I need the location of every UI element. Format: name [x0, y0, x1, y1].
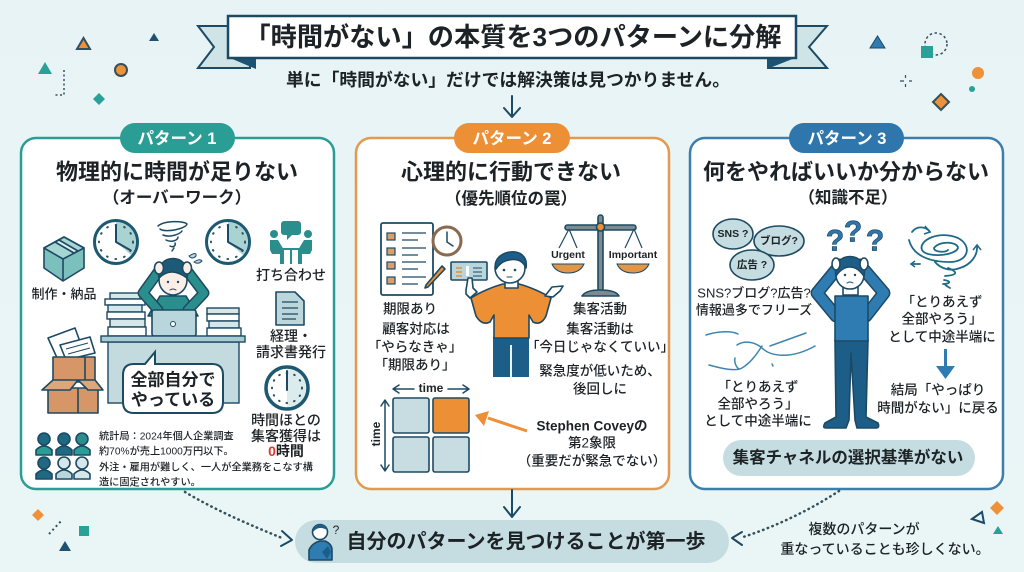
arrow: dotted from pattern 1 — [185, 492, 292, 546]
text: let's do everything right: として中途半端に — [888, 330, 996, 344]
note: patterns can overlap: 複数のパターンが — [808, 521, 920, 537]
text: statistics: 約70%が売上1000万円以下。 — [99, 444, 234, 458]
pill: pattern 3 label — [789, 123, 904, 153]
panel: pattern 3 — [690, 123, 1003, 489]
pill: pattern 1 label: パターン 1 — [138, 129, 216, 148]
icon: cardboard box with papers — [42, 328, 103, 413]
icon: balance scale: Important — [609, 249, 658, 261]
heading: pattern 1: 物理的に時間が足りない — [56, 160, 298, 184]
label: zero hours of marketing: 0時間 — [268, 443, 304, 459]
icon: meeting — [270, 221, 312, 264]
icon: option bubbles — [713, 219, 804, 280]
label: zero hours of marketing — [251, 412, 321, 459]
label: production: 制作・納品 — [31, 286, 97, 302]
text: marketing can wait: 緊急度が低いため、 — [539, 362, 661, 378]
illustration: confused person: ? — [826, 224, 844, 258]
pill: pattern 3 label: パターン 3 — [808, 129, 886, 148]
text: marketing can wait — [526, 320, 674, 396]
icon: tangled lines — [706, 332, 815, 370]
icon: tornado — [158, 222, 187, 251]
book stacks right — [207, 308, 241, 336]
text: customer response: 「やらなきゃ」 — [368, 340, 462, 354]
text: let's do everything right — [888, 294, 996, 344]
icon: balance scale — [551, 215, 658, 296]
icon: document — [276, 292, 304, 325]
heading: pattern 3: 何をやればいいか分からない — [703, 160, 989, 184]
subheading: pattern 2: （優先順位の罠） — [445, 189, 577, 208]
book stacks left — [105, 293, 146, 336]
title banner — [198, 16, 827, 69]
pill: pattern 1 label — [120, 123, 235, 153]
subtitle: 単に「時間がない」だけでは解決策は見つかりません。 — [286, 69, 730, 90]
text: Stephen Covey quadrant 2: Stephen Coveyの — [536, 418, 648, 434]
text: back to no time: 時間がない」に戻る — [877, 400, 999, 416]
arrow: dotted from pattern 3 — [732, 491, 839, 545]
label: accounting — [256, 328, 326, 360]
laptop — [152, 310, 196, 336]
text: back to no time: 結局「やっぱり — [891, 382, 985, 398]
note: patterns can overlap: 重なっていることも珍しくない。 — [780, 541, 990, 557]
icon: clock left — [94, 220, 138, 264]
subheading: pattern 1: （オーバーワーク） — [103, 188, 251, 207]
text: let's do everything right: 「とりあえず — [902, 294, 982, 310]
conclusion banner — [295, 520, 729, 563]
icon: checklist with clock and pencil — [381, 223, 461, 295]
label: accounting: 経理・ — [270, 328, 312, 344]
callout: doing everything myself: やっている — [131, 390, 215, 410]
text: customer response: 顧客対応は — [382, 320, 450, 336]
text: information overload — [696, 286, 812, 318]
label: meeting: 打ち合わせ — [256, 267, 326, 283]
text: customer response: 「期限あり」 — [374, 358, 456, 372]
person — [148, 296, 198, 316]
panel: pattern 2 — [356, 123, 674, 489]
illustration: confused person: ? — [866, 224, 884, 258]
text: let's do everything left: 「とりあえず — [718, 380, 798, 394]
label: zero hours of marketing: 時間ほとの — [251, 412, 321, 428]
panel: pattern 1 — [21, 123, 334, 489]
text: statistics: 外注・雇用が難しく、一人が全業務をこなす構 — [99, 460, 313, 474]
text: let's do everything right: 全部やろう」 — [902, 312, 982, 326]
callout: doing everything myself: 全部自分で — [130, 370, 216, 390]
text: information overload: 情報過多でフリーズ — [696, 302, 812, 318]
icon: swirl — [909, 226, 981, 288]
decorative shapes bottom left — [32, 509, 89, 551]
decorative shapes top left — [38, 33, 159, 105]
arrow: blue down — [936, 349, 955, 379]
text: marketing can wait: 集客活動は — [566, 320, 634, 336]
text: Stephen Covey quadrant 2: （重要だが緊急でない） — [518, 452, 666, 468]
callout: no channel criteria — [723, 440, 975, 476]
illustration: confused person — [817, 216, 884, 428]
text: marketing can wait: 「今日じゃなくていい」 — [526, 338, 674, 354]
illustration: confused person: ? — [844, 216, 862, 248]
desk — [108, 342, 239, 403]
text: let's do everything left: 全部やろう」 — [718, 396, 798, 412]
icon: people group — [36, 433, 90, 479]
icon: clock zero hours — [266, 367, 308, 409]
text: marketing can wait: 後回しに — [573, 382, 627, 396]
decorative shapes top right — [870, 33, 984, 110]
text: statistics: 造に固定されやすい。 — [99, 476, 201, 488]
text: Stephen Covey quadrant 2: 第2象限 — [568, 434, 617, 450]
pill: pattern 2 label: パターン 2 — [473, 129, 551, 148]
decorative shapes bottom right — [972, 501, 1004, 534]
conclusion banner: 自分のパターンを見つけることが第一歩 — [346, 529, 706, 553]
illustration: overworked person at desk — [101, 254, 245, 403]
text: customer response — [368, 320, 462, 372]
heading: pattern 2: 心理的に行動できない — [401, 160, 621, 184]
icon: option bubbles: SNS ? — [718, 228, 748, 240]
text: let's do everything left — [704, 380, 812, 428]
note: patterns can overlap — [780, 521, 990, 557]
chart: priority matrix — [369, 381, 469, 472]
title banner: 「時間がない」の本質を3つのパターンに分解 — [244, 22, 782, 52]
arrow: subtitle to panels — [504, 96, 520, 117]
text: let's do everything left: として中途半端に — [704, 414, 812, 428]
text: information overload: SNS?ブログ?広告? — [697, 286, 811, 300]
text: back to no time — [877, 382, 999, 416]
icon: parcel box — [44, 237, 84, 281]
arrow: centre down — [504, 490, 520, 517]
text: statistics — [99, 430, 313, 488]
icon: option bubbles: ブログ? — [760, 234, 798, 247]
chart: priority matrix: time — [369, 421, 383, 446]
subheading: pattern 3: （知識不足） — [798, 188, 898, 207]
icon: thinking person: ? — [333, 523, 340, 537]
illustration: person with card — [451, 252, 563, 377]
arrow: to quadrant 2 — [475, 411, 527, 431]
text: Stephen Covey quadrant 2 — [518, 418, 666, 468]
callout: doing everything myself — [123, 352, 223, 413]
text: statistics: 統計局：2024年個人企業調査 — [99, 430, 234, 442]
callout: no channel criteria: 集客チャネルの選択基準がない — [733, 447, 963, 467]
icon: balance scale: Urgent — [551, 249, 585, 261]
icon: option bubbles: 広告 ? — [737, 258, 767, 271]
label: accounting: 請求書発行 — [256, 344, 326, 360]
label: has deadline: 期限あり — [383, 302, 437, 316]
pill: pattern 2 label — [454, 123, 570, 153]
label: zero hours of marketing: 集客獲得は — [251, 428, 321, 444]
label: marketing: 集客活動 — [573, 300, 627, 316]
chart: priority matrix: time — [419, 381, 444, 395]
icon: clock right — [206, 220, 250, 264]
icon: thinking person — [309, 523, 340, 560]
